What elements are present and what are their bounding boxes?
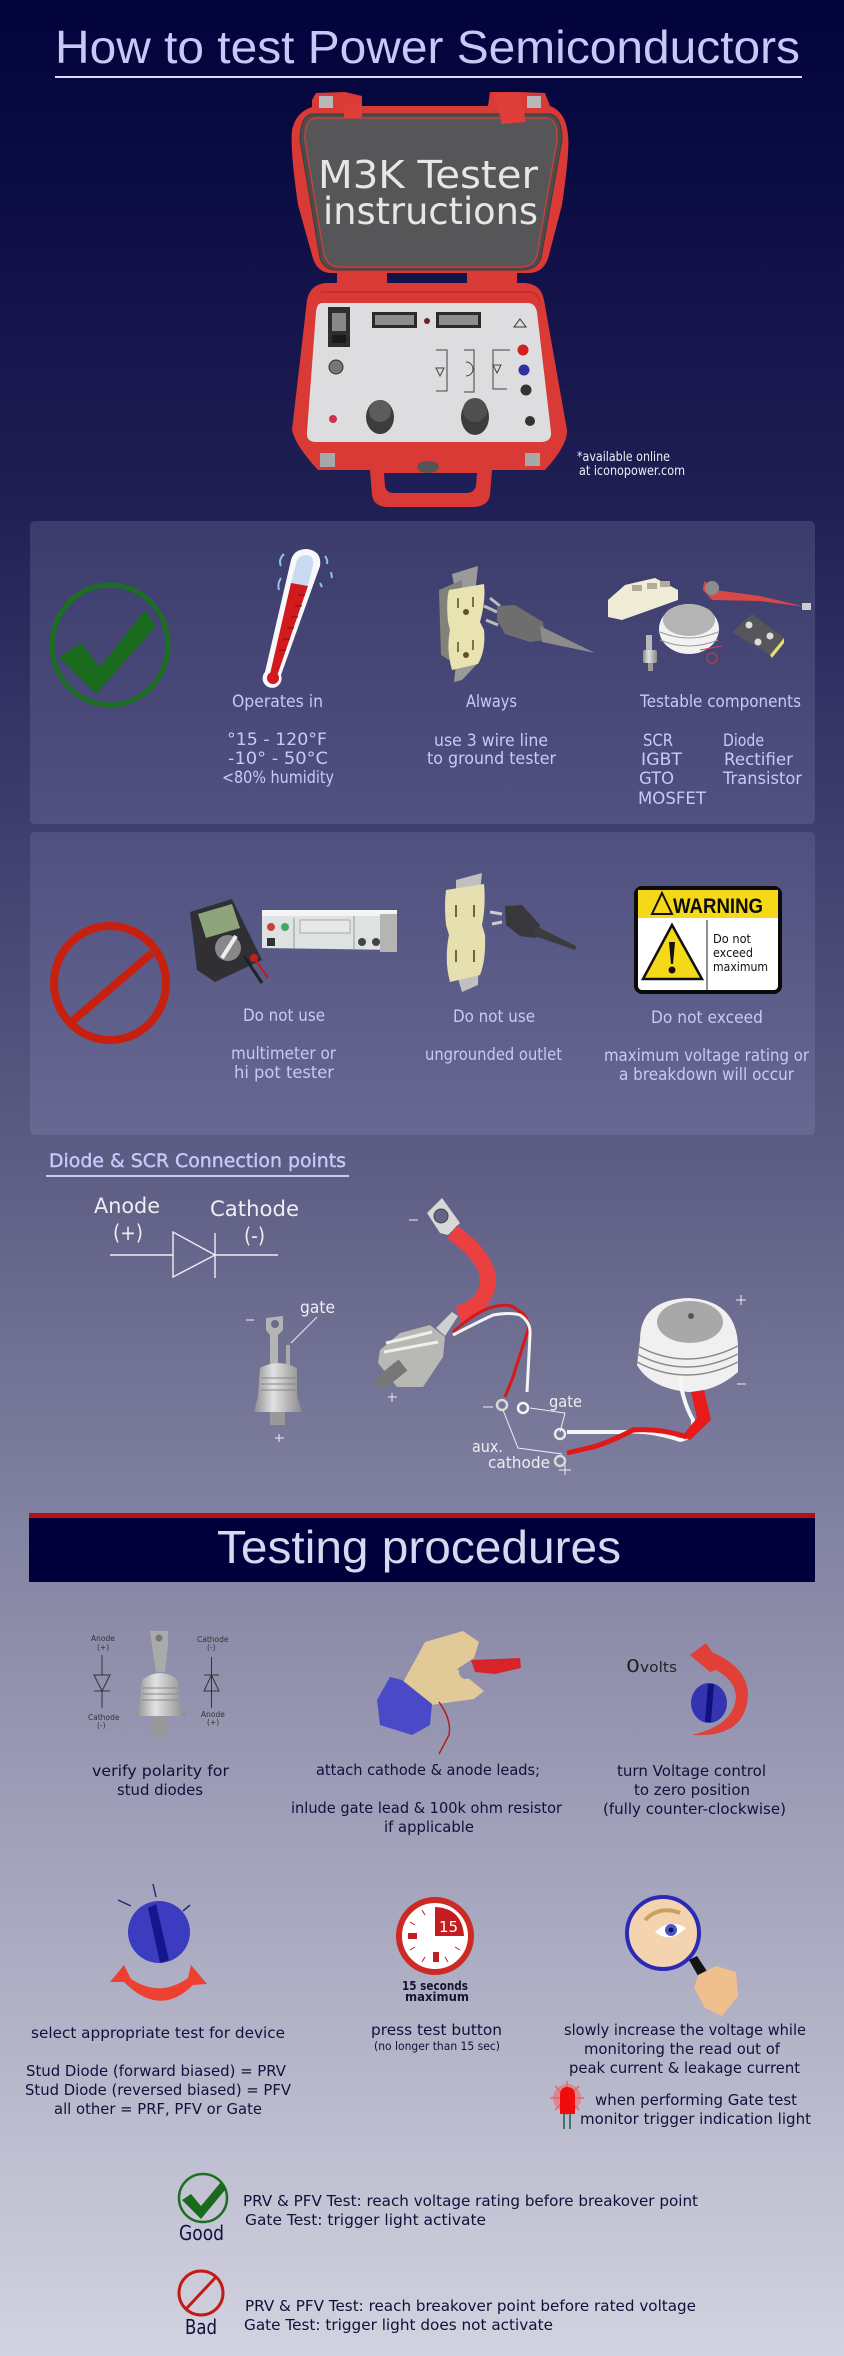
panel: do not: [30, 832, 815, 1135]
text: ungrounded warning: ungrounded outlet: [425, 1045, 562, 1064]
text: testable components: MOSFET: [638, 789, 707, 808]
icon: stud diode polarity: Anode: [91, 1634, 115, 1643]
text: select test: all other = PRF, PFV or Gate: [54, 2100, 262, 2118]
text: verify polarity: [92, 1762, 230, 1799]
icon: stud diode polarity: Cathode: [197, 1635, 229, 1644]
icon: knob with counter-clockwise arrow: volts: [640, 1660, 677, 1676]
text: always: Always: [466, 692, 517, 711]
text: operates in: <80% humidity: [222, 768, 334, 787]
text: turn voltage control: (fully counter-clockwise): [603, 1800, 786, 1818]
diagram: diode symbol: Cathode: [210, 1197, 299, 1221]
text: verify polarity: stud diodes: [117, 1781, 203, 1799]
text: gate test: [580, 2091, 811, 2128]
text: multimeter warning: [231, 1006, 336, 1082]
icon: warning sign: WARNING: [673, 895, 763, 918]
note: available online: *available online: [577, 450, 670, 465]
icon: red LED: [550, 2081, 584, 2129]
step 2: attach leads: [291, 1631, 563, 1836]
icon: 15 second timer: maximum: [405, 1990, 469, 2004]
icon: good check: Good: [179, 2221, 224, 2245]
text: good criteria: Gate Test: trigger light activate: [245, 2211, 486, 2229]
text: increase voltage: [564, 2021, 806, 2077]
diagram: press-pack device with leads: cathode: [488, 1453, 550, 1472]
text: attach leads: inlude gate lead & 100k ohm resistor: [291, 1799, 563, 1817]
text: press test button: press test button: [371, 2021, 502, 2039]
icon: good check: [179, 2174, 227, 2245]
text: bad criteria: [244, 2297, 696, 2334]
case lid: instructions: [323, 190, 538, 233]
icon: stud diode polarity: [88, 1631, 229, 1737]
text: multimeter warning: hi pot tester: [234, 1063, 334, 1082]
text: do not exceed: [604, 1008, 809, 1084]
icon: warning sign: Do not: [713, 931, 751, 946]
case base: [292, 272, 567, 507]
icon: stud diode polarity: (+): [97, 1643, 109, 1652]
step 3: zero voltage: [603, 1643, 786, 1818]
text: operates in: °15 - 120°F: [227, 730, 327, 749]
icon: knob with counter-clockwise arrow: 0: [626, 1656, 640, 1677]
icon: stud diode polarity: Cathode: [88, 1713, 120, 1722]
diagram: press-pack device with leads: aux.: [472, 1437, 503, 1456]
diagram: stud device with cable leads: [378, 1198, 530, 1413]
icon: knob with counter-clockwise arrow: [626, 1643, 748, 1735]
icon: 15 second timer: 15: [439, 1918, 458, 1936]
text: testable components: GTO: [639, 769, 674, 788]
icon: ungrounded outlet and plug: [445, 873, 576, 992]
icon: warning sign: [636, 888, 780, 992]
title: How to test Power Semiconductors: [55, 21, 800, 73]
diagram: diode symbol: [94, 1194, 299, 1278]
text: bad criteria: Gate Test: trigger light does not activate: [244, 2316, 553, 2334]
text: testable components: IGBT: [641, 750, 683, 769]
text: ungrounded warning: [425, 1007, 562, 1064]
text: testable components: [638, 692, 802, 808]
diagram: press-pack device with leads: [472, 1295, 746, 1475]
diagram: stud device with gate: gate: [300, 1298, 335, 1318]
icon: bad prohibition: [179, 2271, 223, 2339]
text: select test: Stud Diode (forward biased) = PRV: [26, 2062, 286, 2080]
text: select test: Stud Diode (reversed biased) = PFV: [25, 2081, 291, 2099]
icon: selector knob with arrows: [110, 1884, 207, 2001]
text: testable components: Diode: [723, 731, 764, 750]
text: testable components: SCR: [643, 731, 673, 750]
icon: hand with clip: [377, 1631, 521, 1754]
icon: thermometer: [263, 549, 332, 688]
text: turn voltage control: [603, 1762, 786, 1818]
diagram: diode symbol: (+): [113, 1221, 143, 1245]
diagram: diode symbol: Anode: [94, 1194, 160, 1218]
text: multimeter warning: multimeter or: [231, 1044, 336, 1063]
icon: green check: [52, 585, 168, 705]
case lid: [292, 92, 568, 273]
text: increase voltage: monitoring the read out of: [584, 2040, 781, 2058]
icon: 15 second timer: [399, 1900, 471, 2004]
heading: connection points: Diode & SCR Connection points: [49, 1150, 346, 1172]
panel: do this: [30, 521, 815, 824]
text: attach leads: attach cathode & anode leads;: [316, 1761, 540, 1779]
diagram: diode symbol: (-): [244, 1224, 265, 1248]
text: do not exceed: maximum voltage rating or: [604, 1046, 809, 1065]
step 4: select test: [25, 1884, 291, 2118]
text: turn voltage control: turn Voltage control: [617, 1762, 766, 1780]
text: always: [427, 692, 556, 768]
icon: 15 second timer: 15 seconds: [402, 1979, 468, 1993]
text: turn voltage control: to zero position: [634, 1781, 750, 1799]
icon: stud diode polarity: Anode: [201, 1710, 225, 1719]
text: multimeter warning: Do not use: [243, 1006, 325, 1025]
banner: testing procedures: Testing procedures: [217, 1521, 621, 1573]
text: always: use 3 wire line: [434, 731, 548, 750]
icon: stud diode polarity: (-): [97, 1721, 106, 1730]
text: do not exceed: a breakdown will occur: [619, 1065, 794, 1084]
text: bad criteria: PRV & PFV Test: reach breakover point before rated voltage: [245, 2297, 696, 2315]
step 5: press test button: [371, 1900, 502, 2053]
illustration: M3K tester case: [292, 92, 685, 507]
text: ungrounded warning: Do not use: [453, 1007, 535, 1026]
icon: stud diode polarity: (+): [207, 1718, 219, 1727]
case lid: M3K Tester: [318, 153, 538, 197]
icon: stud diode polarity: (-): [207, 1643, 216, 1652]
text: press test button: (no longer than 15 sec): [374, 2039, 500, 2053]
text: operates in: -10° - 50°C: [228, 749, 328, 768]
icon: bad prohibition: Bad: [185, 2315, 217, 2339]
text: do not exceed: Do not exceed: [651, 1008, 763, 1027]
diagram: stud device with gate: [246, 1298, 335, 1442]
icon: grounded outlet and plug: [439, 566, 595, 682]
text: operates in: Operates in: [232, 692, 323, 711]
diagram: press-pack device with leads: gate: [549, 1392, 582, 1411]
text: attach leads: if applicable: [384, 1818, 474, 1836]
result: bad: [179, 2271, 696, 2339]
result: good: [179, 2174, 698, 2245]
text: good criteria: [243, 2192, 698, 2229]
text: attach leads: [291, 1761, 563, 1836]
icon: warning sign: exceed: [713, 945, 753, 960]
text: testable components: Rectifier: [724, 750, 793, 769]
note: available online: [577, 450, 685, 479]
icon: multimeter and hi pot tester: [190, 899, 397, 983]
text: verify polarity: verify polarity for: [92, 1762, 230, 1780]
banner: testing procedures: [29, 1513, 815, 1582]
text: gate test: monitor trigger indication light: [580, 2110, 811, 2128]
text: testable components: Transistor: [722, 769, 802, 788]
text: select test: select appropriate test for device: [31, 2024, 285, 2042]
icon: warning sign: maximum: [713, 959, 768, 974]
icon: red prohibition sign: [54, 926, 166, 1040]
text: increase voltage: slowly increase the voltage while: [564, 2021, 806, 2039]
text: gate test: when performing Gate test: [595, 2091, 797, 2109]
icon: magnifier with eye: [627, 1897, 738, 2016]
text: operates in: [222, 692, 334, 787]
text: increase voltage: peak current & leakage current: [569, 2059, 800, 2077]
step 1: verify polarity: [88, 1631, 230, 1799]
note: available online: at iconopower.com: [579, 464, 685, 479]
icon: power components: [608, 578, 811, 671]
text: always: to ground tester: [427, 749, 556, 768]
text: press test button: [371, 2021, 502, 2053]
text: select test: [25, 2024, 291, 2118]
step 6: increase voltage: [550, 1897, 811, 2129]
text: good criteria: PRV & PFV Test: reach voltage rating before breakover point: [243, 2192, 698, 2210]
text: testable components: Testable components: [639, 692, 801, 711]
